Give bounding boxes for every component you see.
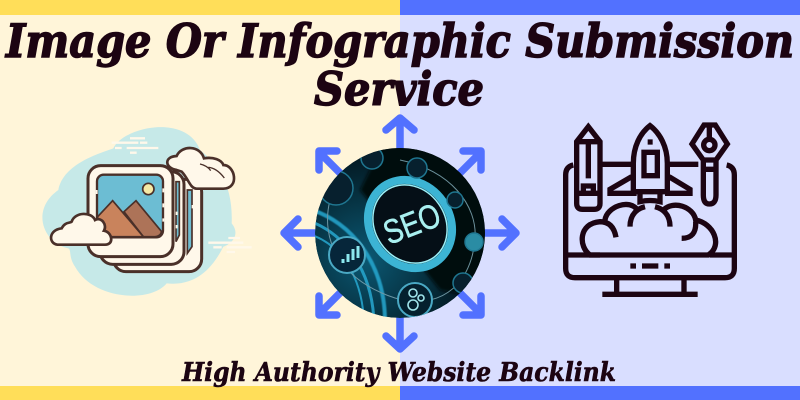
cloud top right — [167, 148, 234, 189]
arrows radiating from centre — [284, 118, 516, 349]
dark upper right — [359, 148, 485, 296]
arrow right — [485, 219, 516, 247]
cloud bottom left — [51, 214, 111, 245]
pen nib — [692, 125, 727, 204]
mountains — [124, 201, 162, 237]
back card — [113, 179, 202, 272]
pencil — [577, 127, 600, 209]
icon: rocket launching from monitor with pencil and pen — [566, 125, 734, 294]
monitor stand — [602, 278, 698, 294]
bottom bar: blue — [400, 386, 800, 400]
title — [4, 14, 794, 116]
SEO label: SEO — [378, 196, 446, 252]
picture frame with sky — [97, 175, 163, 237]
bottom bar: yellow — [0, 386, 400, 400]
SEO circular photo — [315, 148, 485, 318]
front card — [88, 166, 173, 257]
arrow lower right — [458, 291, 481, 315]
subtitle: High Authority Website Backlink — [181, 358, 616, 388]
arrow up — [386, 118, 414, 150]
node: bar chart — [329, 237, 365, 273]
launch cloud — [582, 204, 716, 255]
light streak swirls — [312, 160, 475, 322]
top bar: blue — [400, 0, 800, 15]
top bar: yellow — [0, 0, 400, 15]
monitor — [566, 164, 734, 278]
arrow left — [284, 219, 315, 247]
arrow upper right — [458, 151, 481, 175]
white wind streaks — [112, 138, 252, 252]
pale blue cloud backdrop — [42, 127, 235, 296]
background: right lavender half — [400, 0, 800, 400]
middle card — [100, 172, 184, 264]
title: Service — [314, 62, 484, 116]
monitor buttons — [630, 258, 670, 274]
node: circles — [398, 283, 432, 317]
sun — [143, 183, 154, 195]
main ring — [364, 176, 456, 272]
icon: stacked picture cards with clouds — [42, 127, 252, 296]
arrow lower left — [319, 291, 342, 315]
frame gaps — [97, 188, 193, 228]
nodes on outer ring — [319, 147, 483, 293]
arrow down — [386, 316, 414, 349]
background: left cream half — [0, 0, 400, 400]
rocket — [610, 126, 690, 202]
arrow upper left — [319, 151, 342, 175]
